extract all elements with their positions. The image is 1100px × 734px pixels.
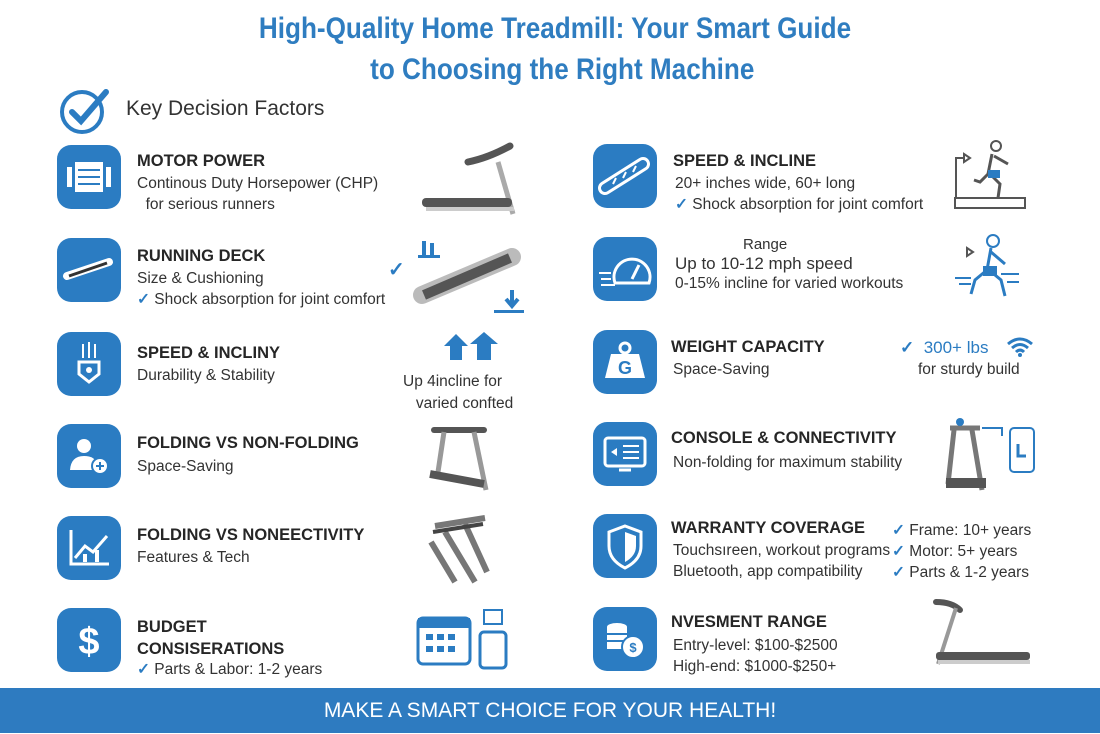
row: speed & incliny: varied confted (416, 395, 513, 412)
icon: dollar: $ (78, 621, 100, 663)
row right: investment: Entry-level: $100-$2500 (673, 637, 838, 654)
icon: shield (593, 514, 657, 578)
icon: calendar and phone (416, 609, 508, 670)
row right: speed & incline (593, 140, 1026, 213)
icon: dollar (57, 608, 121, 672)
icon: checkmark circle (60, 89, 109, 134)
row: running deck: Size & Cushioning (137, 270, 264, 287)
row: speed & incliny (57, 332, 513, 412)
icon: wifi (1007, 338, 1033, 357)
row: budget: ✓ Parts & Labor: 1-2 years (137, 661, 322, 678)
row: folding: Space-Saving (137, 458, 234, 475)
row right: console (593, 418, 1035, 490)
row right: investment (593, 599, 1030, 675)
row right: investment: NVESMENT RANGE (671, 613, 827, 631)
icon: speedometer (593, 237, 657, 301)
icon: weight (593, 330, 657, 394)
icon: runner (955, 234, 1019, 296)
row: motor power: for serious runners (146, 196, 275, 213)
row right: range (593, 234, 1019, 301)
row right: weight capacity (593, 330, 1033, 394)
row: budget (57, 608, 508, 678)
icon: deck (57, 238, 121, 302)
footer banner (0, 688, 1100, 733)
row: folding (57, 424, 488, 490)
row: folding vs noneectivity (57, 515, 490, 584)
row: motor power (57, 142, 516, 215)
row right: weight capacity: for sturdy build (918, 361, 1020, 378)
row: running deck: ✓ Shock absorption for joint comfort (137, 291, 385, 308)
row right: warranty: ✓ Motor: 5+ years (892, 543, 1017, 560)
row right: weight capacity: Space-Saving (673, 361, 770, 378)
row: folding vs noneectivity: FOLDING VS NONEECTIVITY (137, 526, 364, 544)
icon: up arrows (444, 332, 498, 360)
row right: speed & incline: SPEED & INCLINE (673, 152, 816, 170)
row right: speed & incline: 20+ inches wide, 60+ long (675, 175, 855, 192)
icon: sensor (57, 332, 121, 396)
row right: warranty: WARRANTY COVERAGE (671, 519, 865, 537)
row: motor power: Continous Duty Horsepower (CHP) (137, 175, 378, 192)
row: speed & incliny: Up 4incline for (403, 373, 502, 390)
icon: deck illustration (413, 241, 524, 313)
row right: warranty (593, 514, 1031, 581)
footer banner: MAKE A SMART CHOICE FOR YOUR HEALTH! (324, 699, 776, 722)
row right: range: Up to 10-12 mph speed (675, 254, 853, 273)
row: speed & incliny: SPEED & INCLINY (137, 344, 280, 362)
icon: user plus (57, 424, 121, 488)
icon: coins: $ (629, 640, 637, 655)
row: folding vs noneectivity: Features & Tech (137, 549, 250, 566)
row right: weight capacity: ✓ 300+ lbs (900, 338, 988, 357)
icon: coins (593, 607, 657, 671)
row right: speed & incline: ✓ Shock absorption for joint comfort (675, 196, 923, 213)
icon: folded treadmill (428, 515, 490, 584)
row: running deck (57, 238, 524, 313)
row: motor power: MOTOR POWER (137, 152, 265, 170)
row: running deck: RUNNING DECK (137, 247, 265, 265)
row right: range: Range (743, 236, 787, 253)
icon: treadmill (429, 427, 488, 490)
icon: treadmill (422, 142, 516, 215)
icon: motor (57, 145, 121, 209)
row right: console: Non-folding for maximum stability (673, 454, 902, 471)
row right: warranty: Bluetooth, app compatibility (673, 563, 863, 580)
row right: warranty: ✓ Parts & 1-2 years (892, 564, 1029, 581)
row right: investment: High-end: $1000-$250+ (673, 658, 836, 675)
icon: treadmill (933, 599, 1030, 665)
icon: belt (593, 144, 657, 208)
icon: treadmill with phone (946, 418, 1035, 490)
title: to Choosing the Right Machine (370, 53, 754, 86)
icon: chart (57, 516, 121, 580)
row: folding: FOLDING VS NON-FOLDING (137, 434, 359, 452)
row right: range: 0-15% incline for varied workouts (675, 275, 903, 292)
row: budget: CONSISERATIONS (137, 640, 284, 658)
title: High-Quality Home Treadmill: Your Smart Guide (259, 12, 851, 45)
icon: console (593, 422, 657, 486)
row right: warranty: Touchsıreen, workout programs (673, 542, 890, 559)
row: running deck: ✓ (388, 259, 405, 281)
title (259, 12, 851, 86)
row right: warranty: ✓ Frame: 10+ years (892, 522, 1031, 539)
icon: runner on treadmill (954, 140, 1026, 209)
row right: weight capacity: WEIGHT CAPACITY (671, 338, 825, 356)
icon: weight: G (618, 358, 632, 378)
row: speed & incliny: Durability & Stability (137, 367, 275, 384)
subtitle: Key Decision Factors (126, 97, 324, 120)
row: budget: BUDGET (137, 618, 207, 636)
row right: console: CONSOLE & CONNECTIVITY (671, 429, 897, 447)
